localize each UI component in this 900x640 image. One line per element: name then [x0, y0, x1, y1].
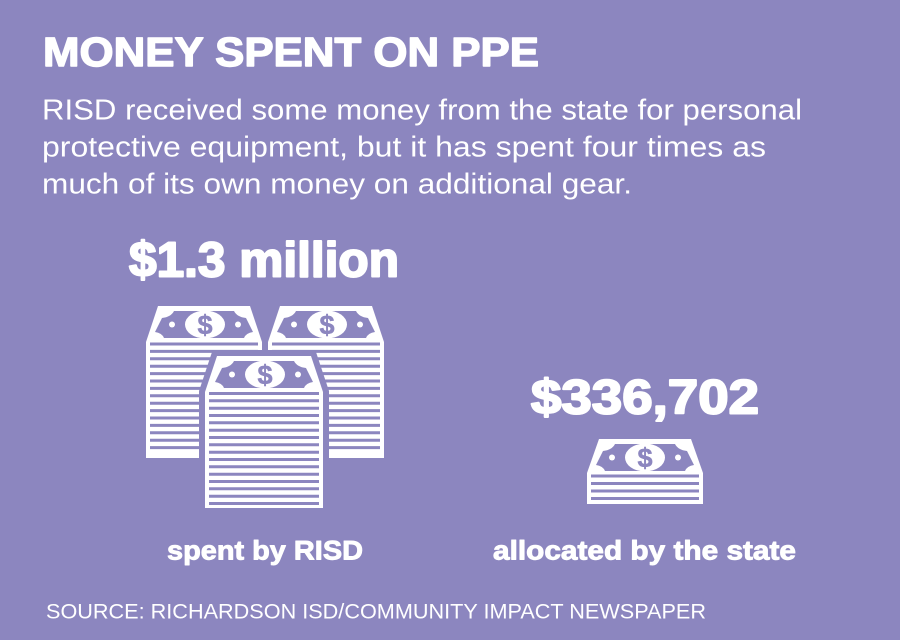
icon: left cash stack — [146, 306, 262, 458]
label: spent by RISD: spent by RISD — [167, 536, 363, 566]
icon: front cash stack — [205, 356, 323, 508]
intro paragraph: RISD received some money from the state for personal — [42, 94, 802, 126]
icon: front cash stack: $ — [257, 360, 273, 390]
icon: left cash stack: $ — [197, 310, 213, 340]
figure: $336,702: $336,702 — [531, 372, 759, 424]
label: allocated by the state: allocated by the state — [493, 536, 796, 566]
figure: $1.3 million: $1.3 million — [129, 234, 399, 288]
intro paragraph — [42, 94, 802, 200]
icon: small cash stack: $ — [637, 443, 653, 473]
icon: small cash stack — [587, 439, 703, 504]
title: MONEY SPENT ON PPE — [43, 29, 539, 75]
source line: SOURCE: RICHARDSON ISD/COMMUNITY IMPACT NEWSPAPER — [46, 600, 706, 624]
icon: three stacks of cash — [146, 306, 384, 508]
intro paragraph: much of its own money on additional gear. — [42, 168, 632, 200]
icon: right cash stack: $ — [319, 310, 335, 340]
icon: right cash stack — [268, 306, 384, 458]
intro paragraph: protective equipment, but it has spent four times as — [42, 132, 766, 164]
